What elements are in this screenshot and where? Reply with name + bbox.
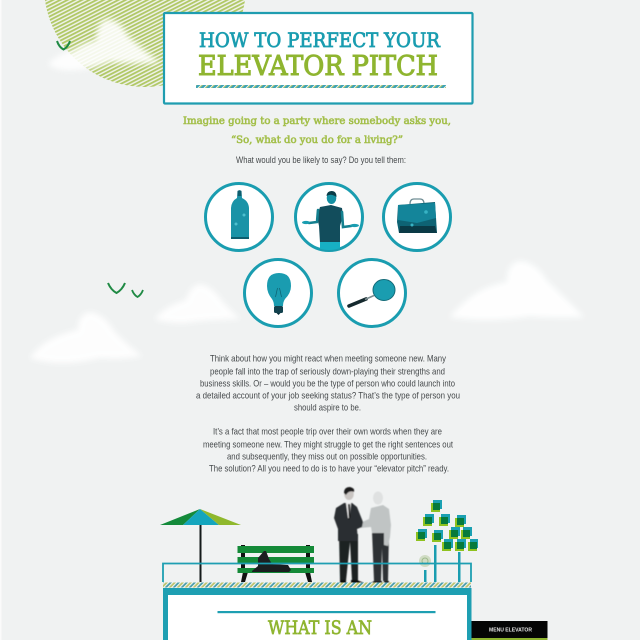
title line 1: HOW TO PERFECT YOUR [199, 28, 441, 52]
title line 2: ELEVATOR PITCH [198, 50, 438, 82]
body text: paragraph 1: Think about how you might react when meeting someone new. Many [210, 354, 446, 364]
body text: paragraph 1: people fall into the trap of seriously down-playing their strengths and [210, 366, 445, 378]
leaf 9 [442, 539, 453, 551]
businessmen shaking hands [334, 487, 391, 583]
leaf 1 [431, 500, 442, 512]
rope stripe on roof edge [163, 582, 471, 588]
birds: pair in the middle left [108, 283, 143, 297]
torso [317, 205, 343, 243]
icon: light bulb [244, 260, 312, 326]
tree of squares [416, 500, 478, 582]
panel: what is an elevator pitch [163, 588, 472, 640]
intro question [183, 115, 451, 146]
cloud: left [30, 312, 142, 363]
body text: paragraph 2: It’s a fact that most people trip over their own words when they are [213, 426, 442, 438]
cloud: right [450, 261, 584, 320]
body text: paragraph 2 [203, 426, 453, 474]
older man [360, 492, 391, 583]
body text: paragraph 1 [196, 354, 460, 414]
body text: paragraph 2: meeting someone new. They might struggle to get the right sentences out [203, 440, 453, 450]
leaf 2 [423, 514, 434, 526]
rope divider [196, 85, 446, 88]
sun: hatched circle [44, 0, 246, 87]
body text: paragraph 2: and subsequently, they miss out on possible opportunities. [227, 452, 427, 462]
roof railing [163, 564, 471, 582]
cloud: middle [155, 284, 240, 323]
menu button: MENU ELEVATOR [489, 628, 532, 634]
title panel [164, 13, 472, 104]
leaf 7 [449, 527, 460, 539]
leaf 4 [455, 515, 466, 527]
body text: paragraph 1: business skills. Or – would you be the type of person who could launch into [200, 378, 455, 390]
leaf 6 [432, 530, 443, 542]
intro question: Imagine going to a party where somebody asks you, [183, 115, 451, 127]
icon: baby bottle [206, 184, 272, 250]
man in suit [334, 487, 364, 583]
intro question: “So, what do you do for a living?” [231, 134, 403, 146]
icon: magnifying glass [338, 260, 406, 326]
menu button [472, 621, 548, 640]
icon: shrugging man [296, 184, 362, 254]
heading: WHAT IS AN [268, 618, 372, 639]
body text: paragraph 1: a detailed account of your job seeking status? That’s the type of person you [196, 390, 460, 402]
icon: briefcase [384, 184, 450, 250]
leaf 8 [461, 527, 472, 539]
prompt line: What would you be likely to say? Do you tell them: [236, 155, 406, 166]
bench with dog [238, 545, 314, 582]
leaf 3 [439, 514, 450, 526]
dog [252, 551, 291, 572]
leaf 11 [468, 539, 478, 551]
heading rule [218, 611, 436, 613]
body text: paragraph 2: The solution? All you need to do is to have your “elevator pitch” ready. [209, 464, 449, 474]
body text: paragraph 1: should aspire to be. [294, 402, 361, 414]
cloud: top left [48, 19, 160, 70]
leaf 10 [455, 539, 466, 551]
leaf 5 [416, 529, 427, 541]
umbrella [160, 509, 241, 582]
bird: top left [57, 41, 70, 50]
